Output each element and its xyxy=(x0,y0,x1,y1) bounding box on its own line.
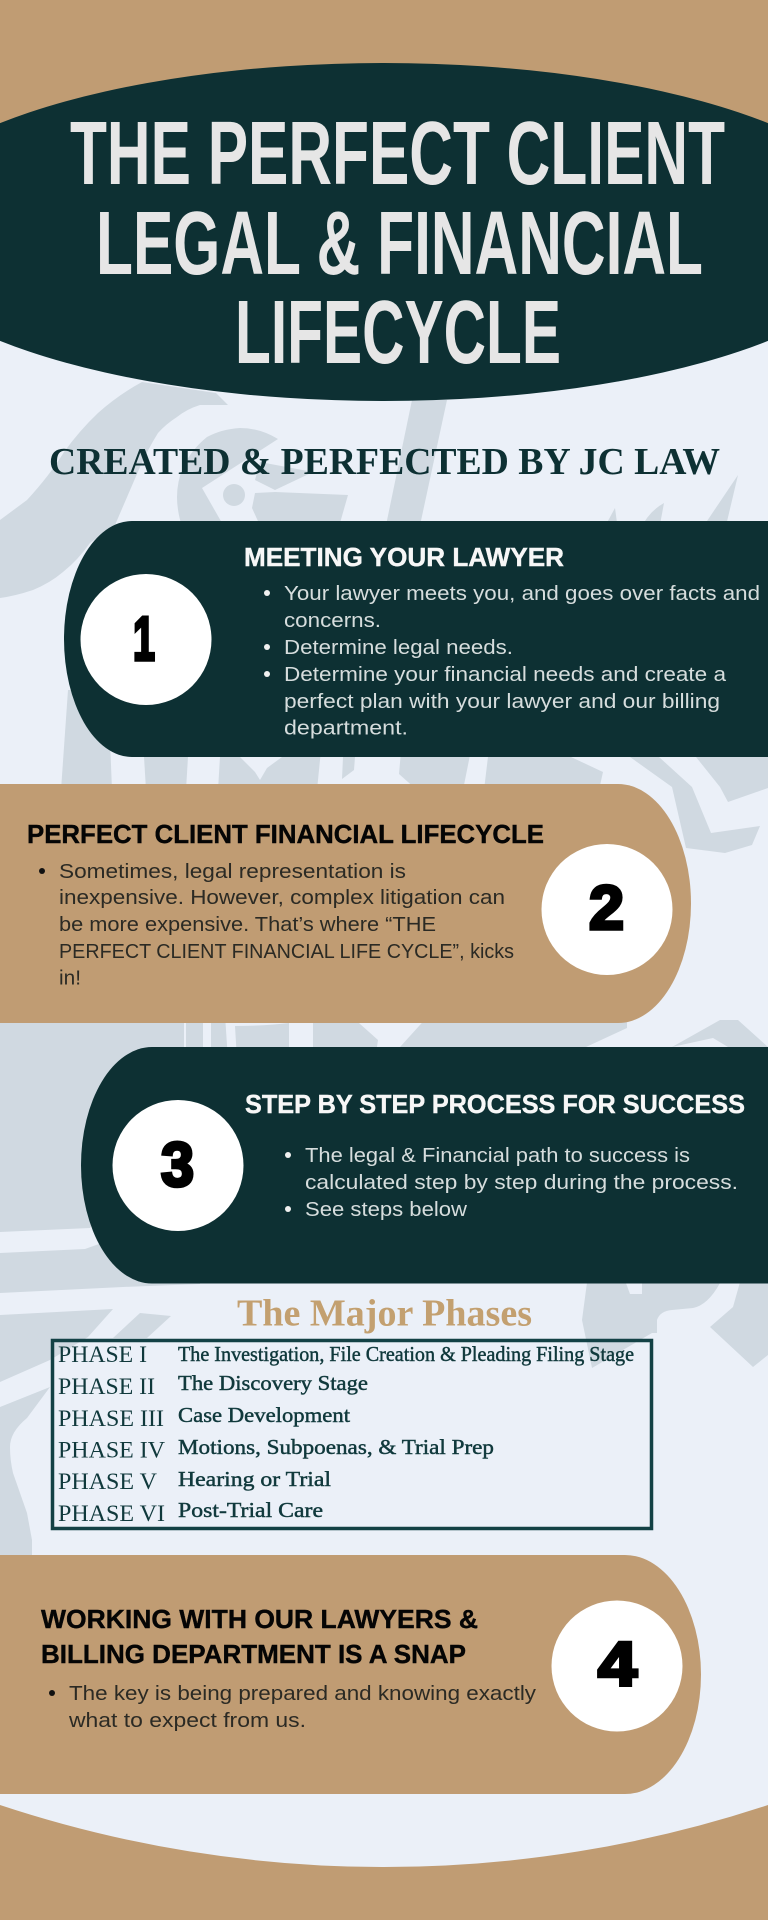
top tan band xyxy=(0,0,768,232)
heading 1: MEETING YOUR LAWYER xyxy=(244,542,564,572)
bullet list 2: inexpensive. However, complex litigation can xyxy=(59,887,505,909)
phase I row: The Investigation, File Creation & Pleading Filing Stage xyxy=(178,1342,634,1366)
heading 4: WORKING WITH OUR LAWYERS & xyxy=(41,1604,478,1634)
number badge 4 xyxy=(552,1600,682,1732)
subtitle: CREATED & PERFECTED BY JC LAW xyxy=(49,441,720,483)
bullet list 1: department. xyxy=(284,718,408,740)
panel 2: perfect client financial lifecycle xyxy=(0,784,691,1023)
number badge 2: 2 xyxy=(589,874,624,943)
bullet list 3: The legal & Financial path to success is xyxy=(305,1145,690,1167)
phase I row: PHASE I xyxy=(58,1342,147,1367)
phase IV row xyxy=(58,1435,494,1462)
bullet list 2 xyxy=(39,861,514,990)
heading 2: PERFECT CLIENT FINANCIAL LIFECYCLE xyxy=(27,819,544,849)
panel 1: meeting your lawyer xyxy=(64,521,768,757)
phase VI row: Post-Trial Care xyxy=(178,1498,323,1522)
heading 4 xyxy=(41,1604,478,1669)
panel 4: working with our lawyers xyxy=(0,1555,701,1794)
number badge 1 xyxy=(80,574,212,705)
bullet list 3 xyxy=(285,1145,738,1221)
bullet list 3: See steps below xyxy=(305,1199,468,1221)
bullet list 1: perfect plan with your lawyer and our billing xyxy=(284,691,720,713)
bullet list 2: PERFECT CLIENT FINANCIAL LIFE CYCLE”, kicks xyxy=(59,941,514,963)
phase IV row: PHASE IV xyxy=(58,1438,165,1462)
number badge 3 xyxy=(112,1100,244,1231)
phase III row xyxy=(58,1403,350,1431)
title text xyxy=(70,104,725,383)
heading 4: BILLING DEPARTMENT IS A SNAP xyxy=(41,1639,466,1669)
number badge 4: 4 xyxy=(598,1630,638,1699)
title banner xyxy=(0,63,768,401)
bullet list 1 xyxy=(264,583,760,740)
phase III row: Case Development xyxy=(178,1403,350,1427)
bullet list 3: calculated step by step during the process. xyxy=(305,1172,738,1194)
number badge 1: 1 xyxy=(133,605,155,674)
phase II row xyxy=(58,1371,368,1399)
phase VI row: PHASE VI xyxy=(58,1501,165,1526)
bullet list 2: be more expensive. That’s where “THE xyxy=(59,914,436,936)
heading: the major phases: The Major Phases xyxy=(237,1292,532,1334)
phase V row xyxy=(58,1467,331,1494)
phase II row: PHASE II xyxy=(58,1374,155,1399)
bullet list 2: Sometimes, legal representation is xyxy=(59,861,406,883)
phase V row: Hearing or Trial xyxy=(178,1467,331,1491)
bullet list 2: in! xyxy=(59,968,81,990)
bullet list 4 xyxy=(49,1683,536,1732)
panel 3: step by step process xyxy=(81,1047,768,1284)
phase IV row: Motions, Subpoenas, & Trial Prep xyxy=(178,1435,494,1459)
number badge 2 xyxy=(542,844,672,975)
bullet list 1: concerns. xyxy=(284,610,381,632)
heading 3: STEP BY STEP PROCESS FOR SUCCESS xyxy=(245,1089,745,1119)
bullet list 4: what to expect from us. xyxy=(68,1710,306,1732)
phase II row: The Discovery Stage xyxy=(178,1371,368,1395)
title text: LIFECYCLE xyxy=(235,283,561,383)
background watermark logo xyxy=(0,382,768,1560)
bullet list 4: The key is being prepared and knowing exactly xyxy=(69,1683,536,1705)
bottom tan band xyxy=(0,1805,768,1920)
phase V row: PHASE V xyxy=(58,1469,157,1494)
bullet list 1: Determine your financial needs and create a xyxy=(284,664,727,686)
phase VI row xyxy=(58,1498,323,1526)
bullet list 1: Determine legal needs. xyxy=(284,637,513,659)
number badge 3: 3 xyxy=(161,1131,194,1200)
bullet list 1: Your lawyer meets you, and goes over facts and xyxy=(284,583,760,605)
phases table xyxy=(52,1340,652,1528)
phase III row: PHASE III xyxy=(58,1406,164,1431)
